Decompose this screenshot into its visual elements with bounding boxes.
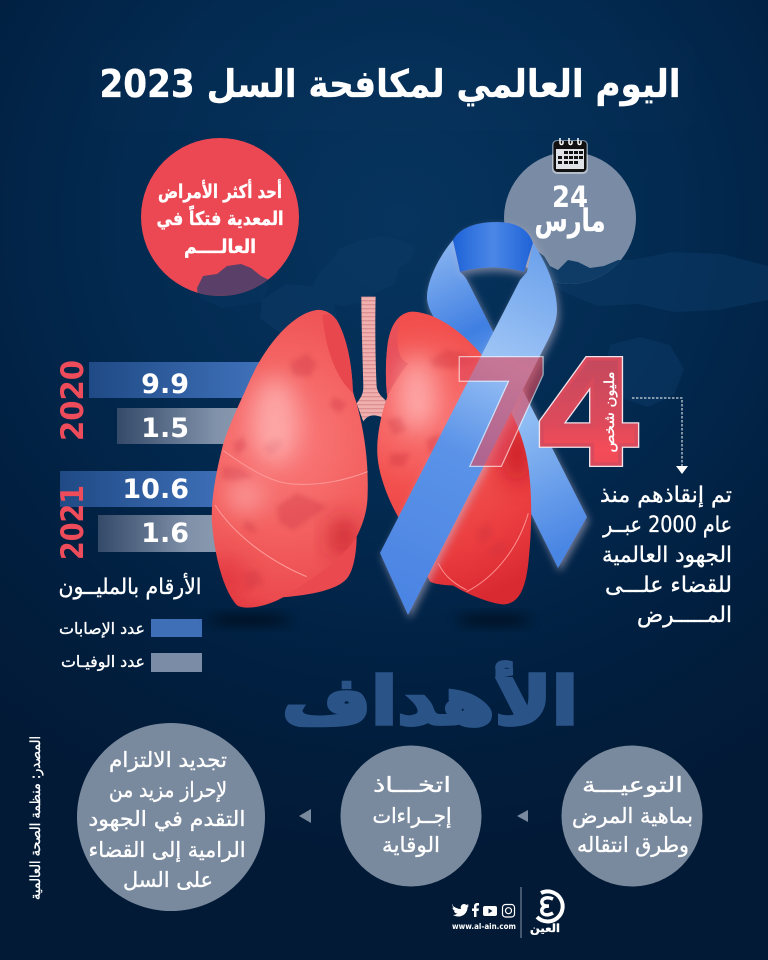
dotted arrow — [632, 398, 688, 474]
text: saved since 2000: عام 2000 عبــر — [602, 513, 732, 538]
goal 1: awareness: بماهية المرض — [572, 804, 693, 828]
right lung — [377, 312, 531, 604]
value labels — [122, 369, 189, 549]
icon: twitter — [452, 904, 469, 916]
grey circle: date: 24 — [552, 180, 588, 214]
grey circle: date: مارس — [534, 203, 606, 239]
ribbon front strand — [380, 222, 557, 615]
goal 3: renew commitment: التقدم في الجهود — [88, 807, 246, 831]
year label 2021: 2021 — [55, 485, 91, 560]
digit 4: 4 — [535, 331, 643, 499]
red circle: most deadly disease — [141, 138, 299, 306]
legend — [58, 573, 202, 672]
goal 2: prevention: اتخـــاذ — [373, 773, 451, 797]
divider — [520, 887, 522, 938]
value labels: 1.5 — [141, 413, 189, 444]
icon: youtube — [483, 906, 497, 916]
social icons — [452, 903, 514, 917]
grey circle: date — [504, 154, 636, 284]
ribbon loop inner band — [453, 222, 533, 272]
legend: عدد الإصابات — [59, 619, 145, 638]
goal 1: awareness: وطرق انتقاله — [577, 833, 689, 857]
goal 2: prevention: الوقاية — [382, 833, 440, 857]
red circle: most deadly disease: أحد أكثر الأمراض — [158, 179, 282, 203]
title: اليوم العالمي لمكافحة السل 2023 — [99, 62, 680, 107]
value labels: 10.6 — [122, 474, 189, 505]
digit 7: 7 — [452, 330, 552, 498]
red circle: most deadly disease: العالــــم — [184, 236, 256, 258]
arrow between goals 2 and 3 — [299, 809, 311, 823]
digit 4: 4 — [535, 331, 643, 499]
ribbon back strand — [427, 240, 587, 568]
bars 2020 and 2021 — [60, 362, 270, 552]
goal 2: prevention — [340, 746, 482, 886]
goals heading: الأهداف — [282, 661, 578, 740]
goal 3: renew commitment: تجديد الالتزام — [109, 748, 227, 772]
value labels: 1.6 — [141, 518, 189, 549]
goal 3: renew commitment: الرامية إلى القضاء — [88, 838, 246, 863]
map overlay on grey circle — [538, 252, 621, 284]
decorative panel behind title — [90, 40, 695, 130]
icon: calendar — [552, 138, 588, 174]
left lung — [207, 310, 368, 608]
legend: الأرقام بالمليــون — [58, 573, 202, 600]
text: saved since 2000: للقضاء علـــى — [605, 573, 732, 598]
arrow between goals 1 and 2 — [517, 810, 528, 822]
million people label: مليون شخص — [602, 372, 618, 452]
text: saved since 2000: المـــــرض — [637, 603, 732, 628]
year label 2020: 2020 — [55, 360, 91, 441]
logo: Al-Ain — [530, 891, 563, 935]
goal 3: renew commitment — [77, 723, 265, 911]
red circle: most deadly disease: المعدية فتكاً في — [156, 205, 284, 230]
big number 74 — [452, 330, 643, 499]
goal 2: prevention: إجــراءات — [372, 804, 452, 829]
goal 1: awareness: التوعيـــة — [582, 773, 683, 797]
goal 1: awareness — [562, 746, 702, 886]
icon: facebook — [472, 903, 479, 917]
text: saved since 2000: تم إنقاذهم منذ — [600, 483, 732, 508]
icon: instagram — [502, 904, 514, 917]
text: saved since 2000 — [600, 483, 732, 628]
source: المصدر: منظمة الصحة العالمية — [28, 736, 44, 900]
goal 3: renew commitment: لإحراز مزيد من — [109, 778, 227, 802]
trachea — [357, 297, 386, 422]
lung shadows — [208, 616, 532, 624]
digit 7: 7 — [452, 330, 552, 498]
legend: عدد الوفيـات — [61, 652, 145, 672]
website: www.al-ain.com — [452, 922, 516, 931]
text: saved since 2000: الجهود العالمية — [602, 543, 732, 568]
map overlay on red circle — [197, 264, 268, 296]
goal 3: renew commitment: على السل — [123, 868, 213, 892]
logo: Al-Ain: العين — [530, 922, 560, 935]
lungs — [207, 310, 531, 608]
value labels: 9.9 — [141, 369, 189, 400]
world map — [200, 236, 768, 407]
